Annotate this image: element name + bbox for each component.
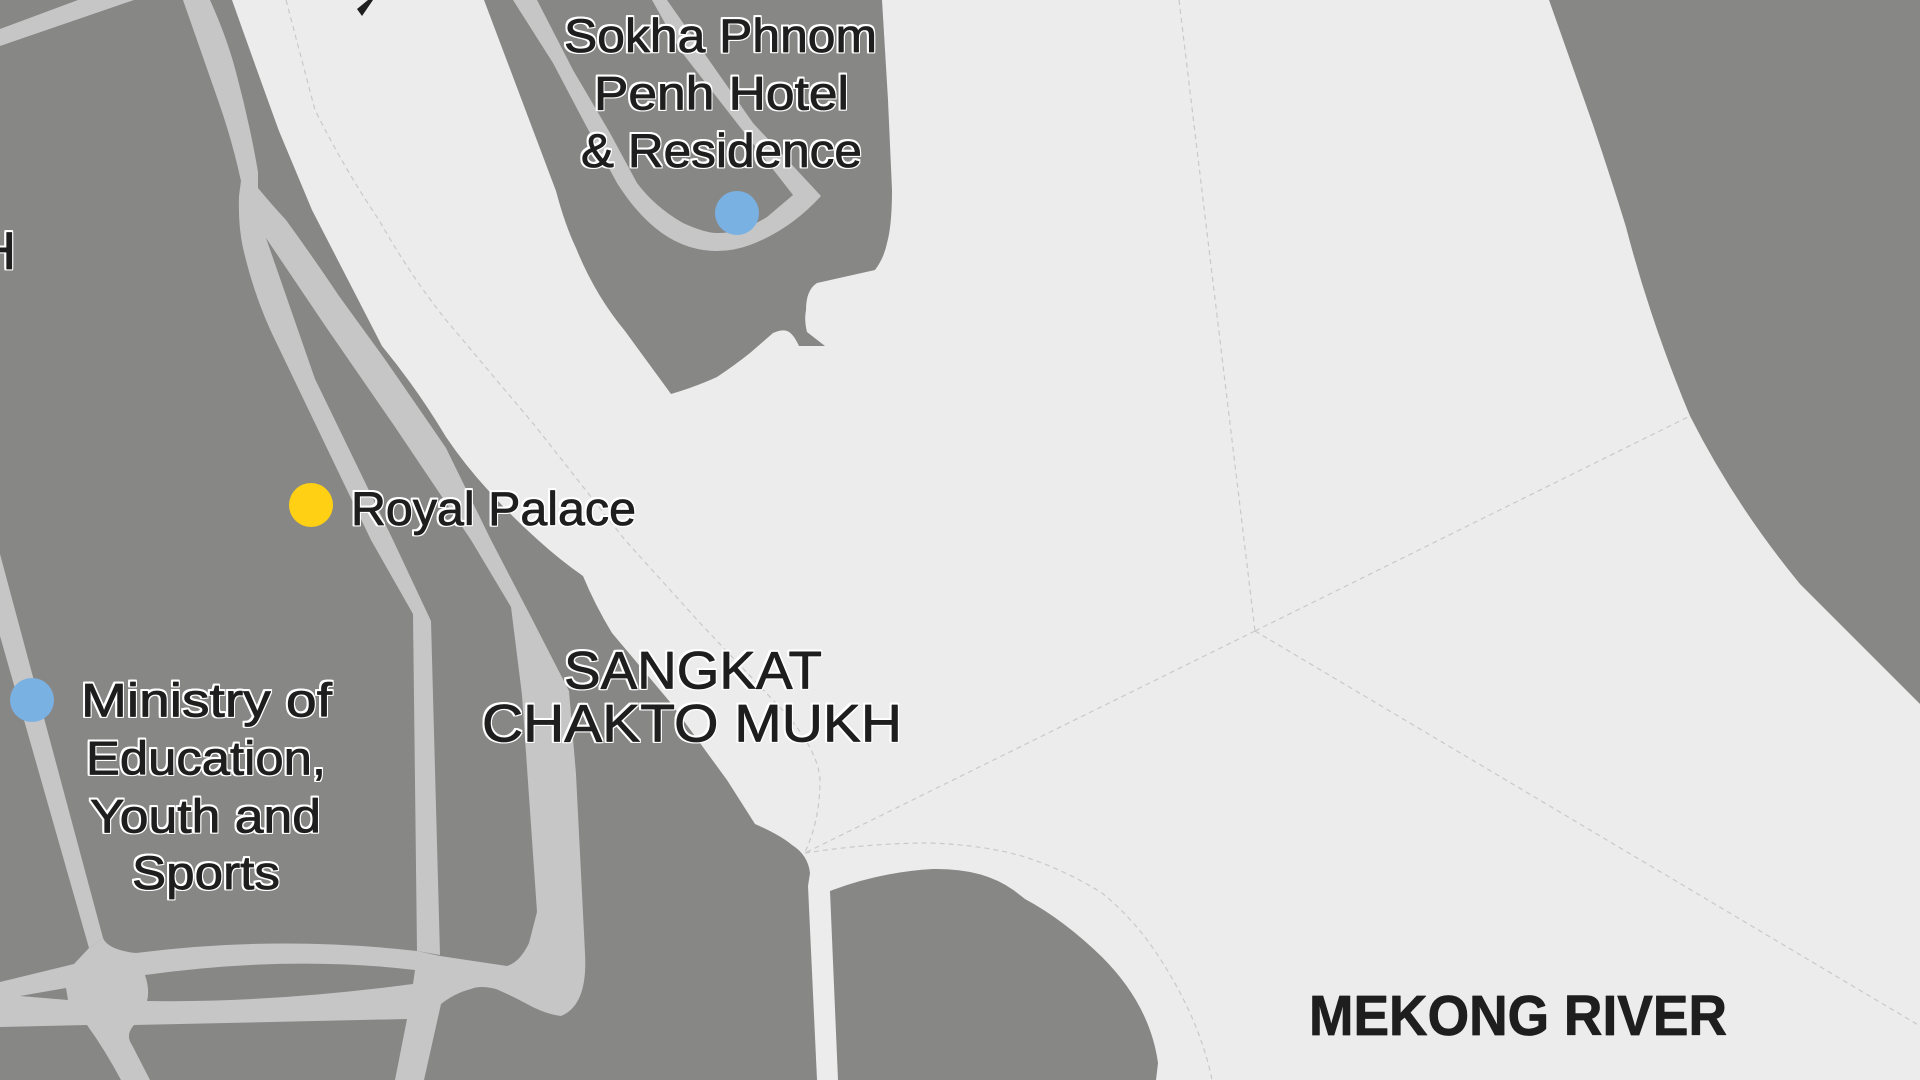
label: Mekong River: MEKONG RIVER [1309, 984, 1727, 1048]
boundary: north channel [1179, 0, 1255, 631]
land: east bank [1549, 0, 1920, 704]
road: northwest diagonal [0, 0, 134, 46]
label: Ministry of Education, Youth and Sports: Youth and [90, 790, 321, 842]
label: Royal Palace: Royal Palace [351, 482, 636, 535]
land: west bank [0, 0, 817, 1080]
marker: Ministry of Education [10, 678, 54, 722]
marker: Royal Palace [289, 483, 333, 527]
roads [0, 0, 821, 1080]
boundary: southeast [1255, 631, 1920, 1026]
label: Sangkat Chakto Mukh [482, 642, 902, 754]
label: Sokha Phnom Penh Hotel & Residence: & Residence [581, 124, 862, 177]
boundary: riverside [286, 0, 820, 852]
label: Sokha Phnom Penh Hotel & Residence: Sokha Phnom [564, 9, 877, 62]
road: west avenue [0, 554, 103, 948]
road: ring junction [0, 938, 473, 1080]
label: Ministry of Education, Youth and Sports: Sports [132, 846, 280, 899]
label: Sokha Phnom Penh Hotel & Residence: Penh Hotel [594, 66, 849, 120]
marker: Sokha hotel [715, 191, 759, 235]
label: Sokha Phnom Penh Hotel & Residence [564, 9, 877, 177]
boundary: southwest [805, 631, 1255, 853]
land: Sokha peninsula [484, 0, 892, 394]
road: Sokha hotel loop [513, 0, 821, 251]
label: Ministry of Education, Youth and Sports: Ministry of [81, 674, 333, 726]
boundary: south arc [805, 843, 1212, 1080]
label: Ministry of Education, Youth and Sports: Education, [86, 732, 326, 784]
road: riverside west branch [239, 188, 440, 955]
black marker fragment [357, 0, 373, 16]
label: Ministry of Education, Youth and Sports [81, 674, 333, 899]
boundary: northeast [1255, 416, 1690, 631]
label: Sangkat Chakto Mukh: SANGKAT [564, 642, 822, 700]
label: Sangkat Chakto Mukh: CHAKTO MUKH [482, 694, 902, 754]
land: south peninsula [830, 869, 1158, 1080]
road: riverside east branch [250, 188, 585, 1016]
road: riverside north [183, 0, 258, 196]
